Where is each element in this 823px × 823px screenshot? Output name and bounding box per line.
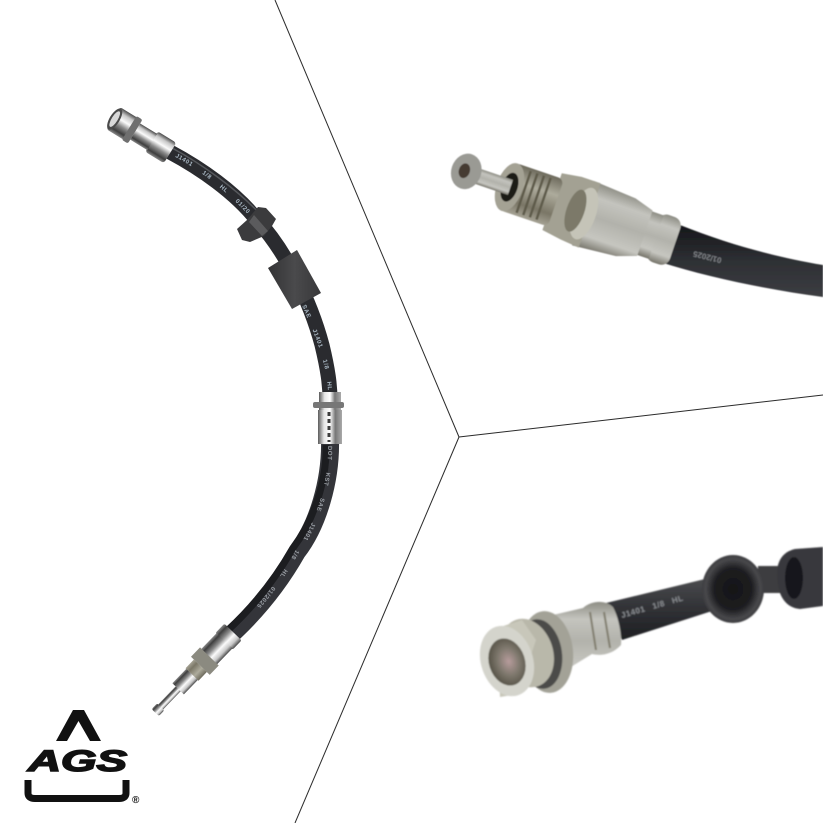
hose: [606, 579, 712, 640]
hose printing: [176, 154, 332, 608]
metal fitting: [471, 602, 621, 703]
middle fitting: [313, 392, 344, 444]
connecting hose: [758, 566, 782, 593]
hose printing: SAE J1401 1/8 HL: [302, 304, 332, 390]
hose: [660, 225, 823, 297]
metal fitting: [440, 136, 686, 277]
logo: AGS: [26, 710, 140, 806]
hose printing: DOT KST SAE J1401 1/8 HL 01/2025: [257, 446, 332, 608]
registered mark: ®: [132, 795, 140, 806]
panel: female fitting detail: [471, 547, 823, 703]
hose printing: J1401 1/8 HL 01/20: [176, 154, 250, 213]
logo caret: [56, 710, 101, 741]
clamp: [237, 207, 276, 242]
panel: full brake hose: [107, 108, 344, 716]
logo base: [28, 780, 126, 798]
first rubber grommet: [702, 555, 764, 623]
second rubber grommet: [777, 547, 823, 609]
hose body: [170, 148, 330, 634]
panel dividers: [275, 0, 823, 823]
lower end fitting: [146, 623, 242, 722]
hose printing: J1401 1/8 HL: [620, 593, 685, 620]
rubber sleeve: [268, 250, 321, 309]
hose printing: 01/2025: [692, 249, 722, 265]
logo wordmark: AGS: [26, 745, 127, 778]
panel: threaded fitting detail: [440, 136, 823, 297]
upper end fitting: [103, 104, 177, 165]
